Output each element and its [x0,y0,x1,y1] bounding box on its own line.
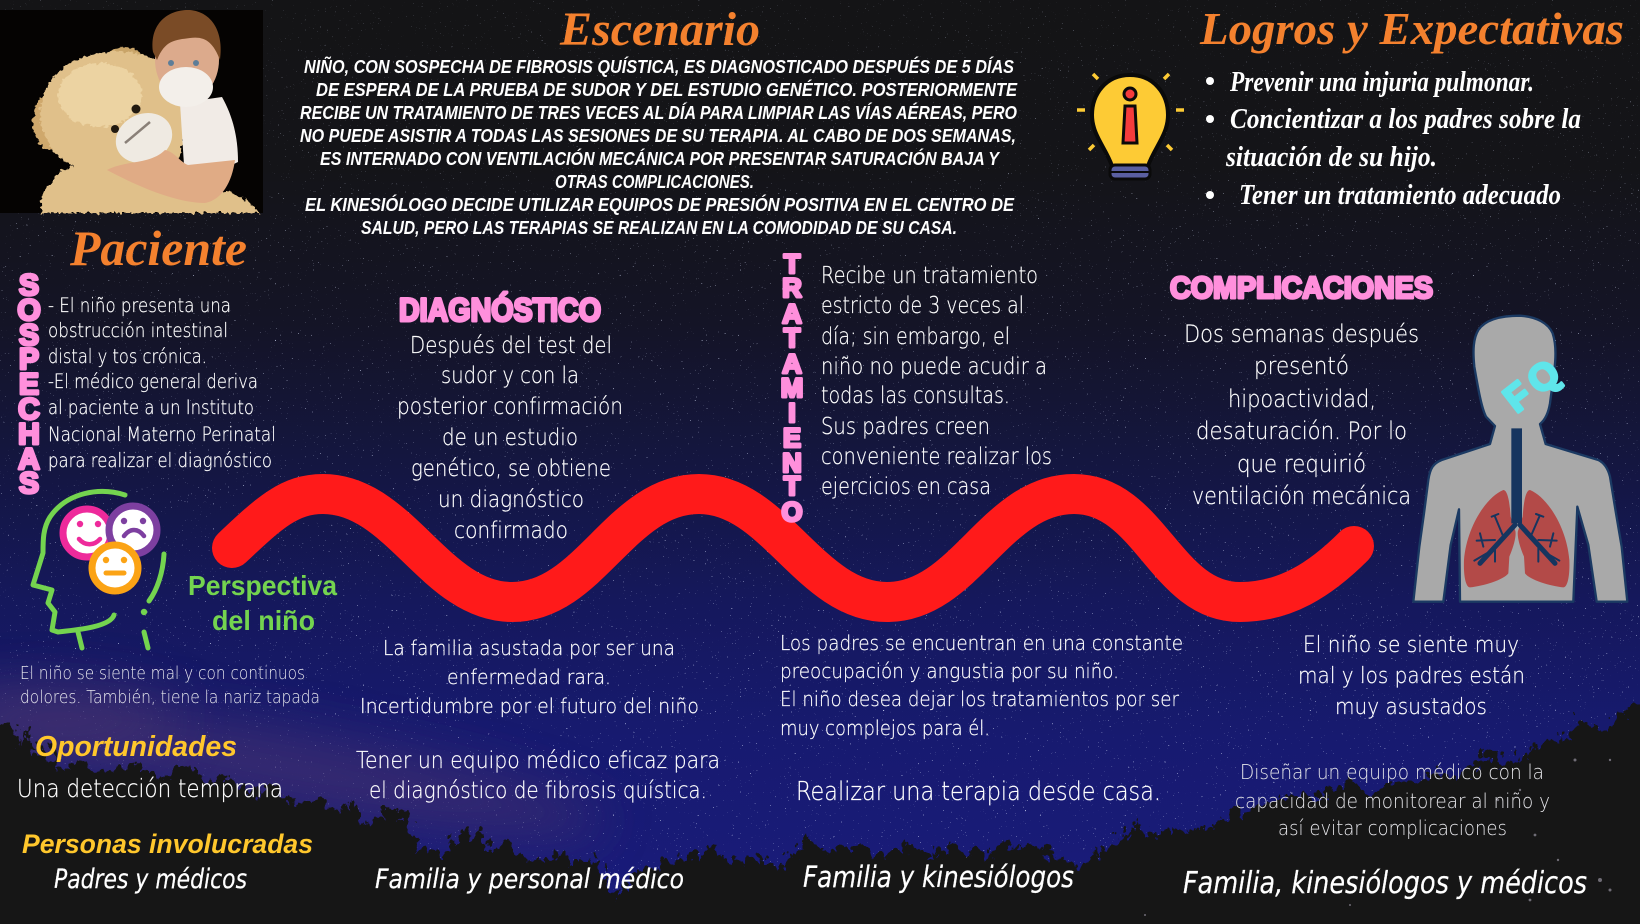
achievements list: Prevenir una injuria pulmonar. [1229,67,1534,98]
vertical heading: Sospechas: O [17,294,41,327]
scenario text: ES INTERNADO CON VENTILACIÓN MECÁNICA POR PRESENTAR SATURACIÓN BAJA Y [320,148,1001,169]
column 4 perspective text: muy asustados [1335,694,1487,720]
patient suspicion text: distal y tos crónica. [48,345,207,368]
vertical heading: Sospechas: H [18,418,40,451]
column 2 perspective text: La familia asustada por ser una [383,636,675,660]
opportunity 4: Diseñar un equipo médico con la [1240,760,1544,784]
title: Escenario: Escenario [559,3,760,56]
patient photo [0,10,263,213]
treatment text: niño no puede acudir a [821,354,1047,380]
scenario text: NO PUEDE ASISTIR A TODAS LAS SESIONES DE SU TERAPIA. AL CABO DE DOS SEMANAS, [300,126,1016,146]
patient suspicion text: - El niño presenta una [48,294,231,317]
complications text: desaturación. Por lo [1196,417,1407,445]
scenario text: EL KINESIÓLOGO DECIDE UTILIZAR EQUIPOS DE PRESIÓN POSITIVA EN EL CENTRO DE [305,194,1015,215]
scenario text: OTRAS COMPLICACIONES. [555,172,754,192]
complications text: ventilación mecánica [1192,482,1411,510]
treatment text: Sus padres creen [821,414,990,440]
icon: light bulb [1077,74,1184,179]
column 3 perspective text: muy complejos para él. [780,716,990,740]
heading: Paciente: Paciente [69,220,247,276]
column 4 perspective text: El niño se siente muy [1303,632,1519,658]
diagnosis text: posterior confirmación [397,394,623,420]
label: Perspectiva del niño [188,570,337,636]
vertical heading: Tratamiento: I [788,398,796,428]
diagnosis text: sudor y con la [441,363,579,389]
vertical heading: Tratamiento: T [784,323,801,353]
FQ label: Q [1519,351,1568,402]
patient suspicion text [48,294,276,472]
column 3 perspective text: Los padres se encuentran en una constante [780,631,1183,655]
complications text: hipoactividad, [1228,385,1376,413]
column 4 perspective text: mal y los padres están [1298,663,1525,689]
vertical heading: Tratamiento: T [784,471,801,501]
column 3 perspective text [780,631,1183,740]
column 2 perspective text: Incertidumbre por el futuro del niño [360,694,699,718]
heading: Personas involucradas: Personas involucradas [22,829,313,859]
column 3 perspective text: El niño desea dejar los tratamientos por ser [780,687,1180,711]
tree silhouette [0,700,1640,924]
child perspective text: dolores. También, tiene la nariz tapada [20,688,320,708]
title: Logros y Expectativas: Logros y Expectativas [1199,3,1624,54]
vertical heading: Sospechas: S [19,319,39,352]
boy [107,10,238,203]
achievements list: situación de su hijo. [1225,142,1437,173]
diagnosis text: genético, se obtiene [411,456,611,482]
opportunity 1: Una detección temprana [17,774,283,803]
vertical heading: Tratamiento: M [781,373,803,403]
FQ label [1496,351,1568,420]
column 2 perspective text [360,636,699,718]
forest glints [1144,758,1612,916]
vertical heading: Tratamiento: O [781,497,803,527]
treatment text: conveniente realizar los [821,444,1052,470]
vertical heading: Tratamiento: E [783,423,801,453]
vertical heading: Tratamiento: R [782,273,802,303]
patient suspicion text: obstrucción intestinal [48,319,228,342]
column 3 perspective text: preocupación y angustia por su niño. [780,659,1119,683]
label: Perspectiva del niño: del niño [212,605,315,636]
heading: Oportunidades: Oportunidades [35,731,237,763]
vertical heading: Sospechas [17,269,41,500]
people involved 1: Padres y médicos [54,864,247,895]
diagnosis text: de un estudio [442,425,578,451]
people involved 3: Familia y kinesiólogos [803,860,1074,894]
child perspective text: El niño se siente mal y con continuos [20,664,305,684]
vertical heading: Sospechas: P [19,343,39,376]
diagnosis text [397,333,623,544]
vertical heading: Tratamiento: T [784,249,801,279]
vertical heading: Tratamiento: A [782,349,802,379]
teddy bear [33,47,260,213]
vertical heading: Sospechas: S [19,467,39,500]
opportunity 2: Tener un equipo médico eficaz para [356,748,720,774]
treatment text: día; sin embargo, el [821,324,1010,350]
wave: journey line [232,494,1354,602]
treatment text: Recibe un tratamiento [821,263,1038,289]
heading: Diagnóstico: DIAGNÓSTICO [399,292,601,328]
treatment text: ejercicios en casa [821,474,991,500]
vertical heading: Sospechas: C [18,393,40,426]
achievements list: Concientizar a los padres sobre la [1230,104,1581,135]
trachea and bronchi [1474,428,1559,563]
vertical heading: Sospechas: E [19,368,39,401]
achievements list [1206,67,1581,211]
heading: Complicaciones: COMPLICACIONES [1170,270,1433,305]
column 2 perspective text: enfermedad rara. [447,665,611,689]
opportunity 2 [356,748,720,804]
icon: body with lungs [1413,316,1627,602]
treatment text [821,263,1052,500]
scenario text: SALUD, PERO LAS TERAPIAS SE REALIZAN EN LA COMODIDAD DE SU CASA. [361,218,957,238]
diagnosis text: un diagnóstico [438,487,584,513]
complications text: presentó [1254,352,1349,380]
patient suspicion text: para realizar el diagnóstico [48,449,272,472]
opportunity 2: el diagnóstico de fibrosis quística. [369,778,707,804]
label: Perspectiva del niño: Perspectiva [188,570,337,601]
opportunity 4 [1235,760,1550,840]
opportunity 3: Realizar una terapia desde casa. [796,777,1161,807]
scenario text: RECIBE UN TRATAMIENTO DE TRES VECES AL DÍA PARA LIMPIAR LAS VÍAS AÉREAS, PERO [300,102,1017,123]
scenario text: DE ESPERA DE LA PRUEBA DE SUDOR Y DEL ESTUDIO GENÉTICO. POSTERIORMENTE [316,79,1018,100]
treatment text: estricto de 3 veces al [821,293,1024,319]
diagnosis text: Después del test del [410,333,612,359]
vertical heading: Tratamiento [781,249,803,527]
vertical heading: Tratamiento: N [782,448,802,478]
FQ label: F [1496,373,1539,420]
vertical heading: Tratamiento: A [782,299,802,329]
patient suspicion text: al paciente a un Instituto [48,396,254,419]
scenario text: NIÑO, CON SOSPECHA DE FIBROSIS QUÍSTICA, ES DIAGNOSTICADO DESPUÉS DE 5 DÍAS [304,56,1014,77]
complications text [1184,320,1419,510]
lungs [1464,490,1569,587]
column 4 perspective text [1298,632,1525,720]
complications text: que requirió [1237,450,1366,478]
patient suspicion text: -El médico general deriva [48,370,258,393]
treatment text: todas las consultas. [821,383,1010,409]
scenario text [300,56,1018,238]
icon: head with emotions [33,491,164,648]
vertical heading: Sospechas: A [18,443,40,476]
people involved 2: Familia y personal médico [375,864,684,895]
child perspective text [20,664,320,708]
achievements list: Tener un tratamiento adecuado [1239,180,1561,211]
diagnosis text: confirmado [454,518,568,544]
vertical heading: Sospechas: S [19,269,39,302]
opportunity 4: así evitar complicaciones [1278,816,1507,840]
opportunity 4: capacidad de monitorear al niño y [1235,789,1550,813]
complications text: Dos semanas después [1184,320,1419,348]
patient suspicion text: Nacional Materno Perinatal [48,423,276,446]
